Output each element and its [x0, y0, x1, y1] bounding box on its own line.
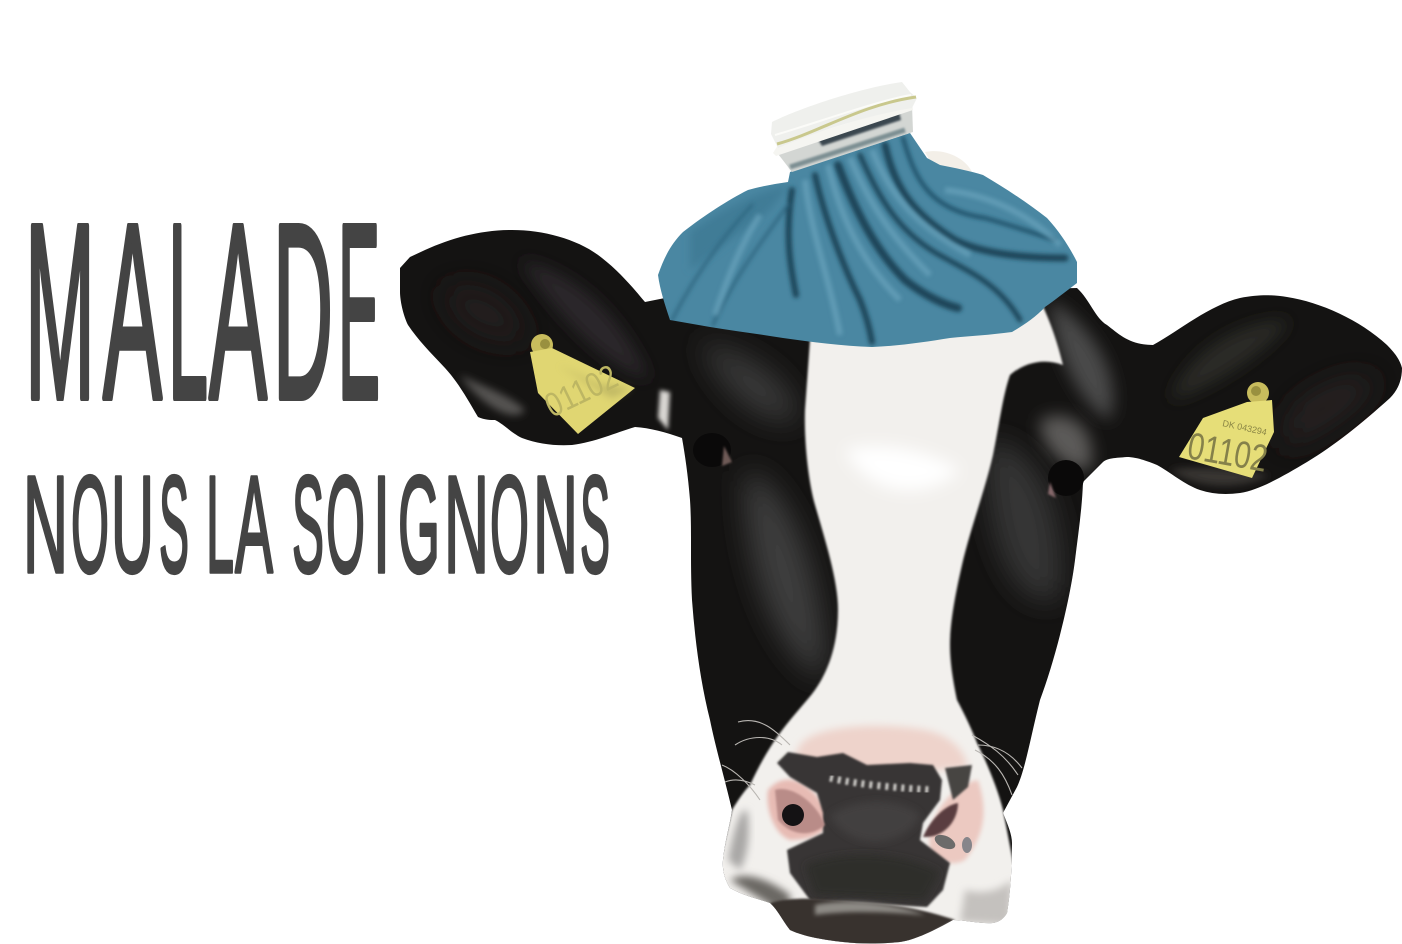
light folds: [715, 150, 1060, 335]
lid: [771, 82, 917, 148]
title: Malade: A: [103, 172, 162, 451]
right ear tag: DK 043294: [1222, 418, 1268, 437]
subtitle: nous la soignons: O: [71, 448, 109, 602]
bag fabric: [658, 133, 1077, 347]
right eye: [1048, 460, 1084, 498]
lower lip: [770, 899, 955, 944]
text: E: [338, 172, 380, 451]
left ear shading: [528, 264, 644, 375]
subtitle: nous la soignons: [23, 448, 610, 602]
subtitle: nous la soignons: L: [206, 448, 234, 602]
right ear shading: [1176, 320, 1282, 396]
subtitle: nous la soignons: O: [326, 448, 365, 602]
head and ears: [395, 225, 1402, 944]
ice bag: [650, 82, 1085, 355]
subtitle: nous la soignons: S: [159, 448, 189, 602]
white blaze: [700, 300, 1063, 944]
bag neck: [775, 105, 913, 172]
wet nose highlights: [830, 778, 932, 790]
title: Malade: [25, 172, 380, 451]
left eye: [693, 433, 732, 467]
left panel shade: [692, 190, 780, 262]
right nose patch: [945, 765, 972, 800]
dark folds: [672, 138, 1065, 342]
subtitle: nous la soignons: N: [533, 448, 578, 602]
subtitle: nous la soignons: I: [373, 448, 390, 602]
title: Malade: D: [273, 172, 333, 451]
subtitle: nous la soignons: N: [23, 448, 68, 602]
subtitle: nous la soignons: S: [292, 448, 324, 602]
left ear tag: [530, 334, 635, 434]
title: Malade: A: [209, 172, 267, 451]
fur around right horn base: [1050, 300, 1113, 420]
muzzle side shading: [728, 810, 749, 870]
subtitle: nous la soignons: O: [490, 448, 529, 602]
text: S: [580, 448, 610, 602]
dark nose: [777, 752, 950, 907]
ring: [773, 103, 913, 156]
subtitle: nous la soignons: G: [398, 448, 440, 602]
pink muzzle: [790, 726, 968, 775]
title: Malade: L: [168, 172, 208, 451]
left ear tag: 01102: [539, 358, 624, 425]
forehead bump behind bag: [925, 151, 972, 172]
illustration: cow head with ice bag: [395, 82, 1402, 944]
left neck white tuft: [658, 390, 670, 430]
nostrils: [775, 789, 825, 833]
fur highlights on the cheeks: [700, 340, 800, 422]
forehead and blaze shading: [852, 446, 952, 490]
right ear tag: [1179, 382, 1274, 481]
subtitle: nous la soignons: A: [235, 448, 273, 602]
title: Malade: M: [25, 172, 95, 451]
neck window: [817, 112, 901, 146]
whiskers: [722, 721, 1022, 800]
subtitle: nous la soignons: U: [111, 448, 154, 602]
right ear tag: 01102: [1184, 426, 1271, 481]
subtitle: nous la soignons: N: [444, 448, 489, 602]
muzzle spots: [934, 834, 956, 850]
